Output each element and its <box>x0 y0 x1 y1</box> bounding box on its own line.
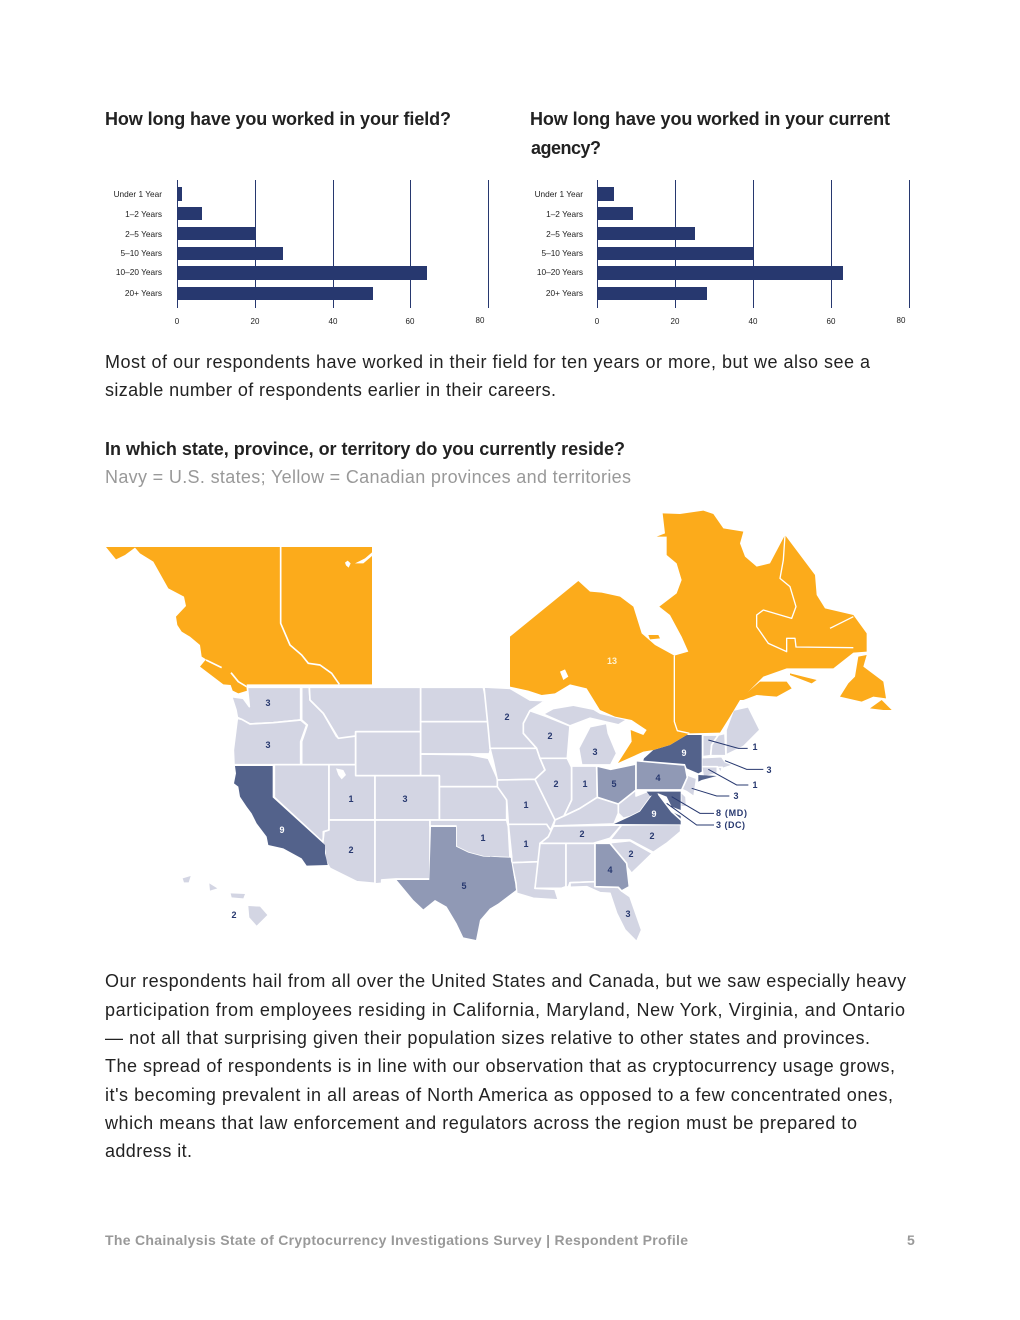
bar chart: years in current agency: 1–2 Years <box>546 209 583 219</box>
heading: residence question: In which state, province, or territory do you currently reside? <box>105 439 625 459</box>
state and province counts: 1 <box>523 800 529 810</box>
heading: years in field: How long have you worked in your field? <box>105 109 451 129</box>
bar chart: years in field: 60 <box>406 317 415 326</box>
text block: tenure summary: sizable number of respondents earlier in their careers. <box>105 380 556 400</box>
state and province counts: 2 <box>348 845 354 855</box>
bar chart: years in field: 40 <box>329 317 338 326</box>
text block: tenure summary: Most of our respondents have worked in their field for ten years or more, but we also see a <box>105 352 871 372</box>
state and province counts: 3 <box>733 791 739 801</box>
state and province counts: 5 <box>611 779 617 789</box>
bar chart: years in current agency: 40 <box>749 317 758 326</box>
bar chart: years in field: 5–10 Years <box>120 248 162 258</box>
heading: years in current agency: How long have you worked in your current <box>530 109 890 129</box>
bar chart: years in field: 1–2 Years <box>125 209 162 219</box>
bar chart: years in field <box>114 180 488 326</box>
state and province counts: 3 <box>265 698 271 708</box>
bar chart: years in current agency: Under 1 Year <box>535 189 583 199</box>
state and province counts: 4 <box>607 865 613 875</box>
bar chart: years in current agency: 10–20 Years <box>537 267 583 277</box>
bar chart: years in current agency: 0 <box>595 317 600 326</box>
state and province counts: 2 <box>547 731 553 741</box>
bar chart: years in current agency: 60 <box>827 317 836 326</box>
footer: page number: 5 <box>907 1232 915 1248</box>
state and province counts: 1 <box>752 780 758 790</box>
state and province counts: 4 <box>655 773 661 783</box>
state and province counts: 3 <box>625 909 631 919</box>
state and province counts: 3 <box>592 747 598 757</box>
state and province counts: 3 <box>766 765 772 775</box>
bar chart: years in current agency: 20 <box>671 317 680 326</box>
bar chart: years in field: 20 <box>251 317 260 326</box>
western United States <box>183 687 516 940</box>
eastern United States <box>484 687 763 942</box>
Canada west: British Columbia and Alberta <box>106 547 372 693</box>
bar chart: years in current agency: 2–5 Years <box>546 229 583 239</box>
text block: geographic summary <box>104 971 906 1161</box>
state and province counts: 2 <box>231 910 237 920</box>
state and province counts <box>231 656 772 920</box>
state and province counts: 9 <box>651 809 657 819</box>
text block: geographic summary: — not all that surprising given their population sizes relative to other states and provinces. <box>105 1028 870 1048</box>
state and province counts: 1 <box>752 742 758 752</box>
state and province counts: 5 <box>461 881 467 891</box>
text block: geographic summary: which means that law enforcement and regulators across the region must be prepared to <box>104 1113 857 1133</box>
state and province counts: 3 <box>265 740 271 750</box>
Canada east: Ontario, Quebec, Labrador, Maritimes <box>510 511 892 763</box>
bar chart: years in field: Under 1 Year <box>114 189 162 199</box>
state and province counts: 2 <box>553 779 559 789</box>
bar chart: years in current agency: 80 <box>897 316 906 325</box>
text block: geographic summary: participation from employees residing in California, Maryland, New York, Virginia, and Ontario <box>105 1000 905 1020</box>
state and province counts: 9 <box>279 825 285 835</box>
bar chart: years in field: 10–20 Years <box>116 267 162 277</box>
state and province counts: 8 (MD) <box>716 808 747 818</box>
state and province counts: 9 <box>681 748 687 758</box>
state and province counts: 1 <box>348 794 354 804</box>
heading: years in current agency <box>530 109 890 158</box>
map: North America respondents <box>106 511 892 942</box>
leader lines <box>667 740 763 825</box>
state and province counts: 1 <box>523 839 529 849</box>
text block: geographic summary: The spread of respondents is in line with our observation that as cryptocurrency usage grows, <box>105 1056 895 1076</box>
text block: geographic summary: address it. <box>105 1141 192 1161</box>
bar chart: years in field: 2–5 Years <box>125 229 162 239</box>
state and province counts: 1 <box>480 833 486 843</box>
bar chart: years in current agency: 5–10 Years <box>541 248 583 258</box>
state and province counts: 13 <box>607 656 617 666</box>
state and province counts: 2 <box>628 849 634 859</box>
state and province counts: 1 <box>582 779 588 789</box>
bar chart: years in field: 80 <box>476 316 485 325</box>
text block: geographic summary: Our respondents hail from all over the United States and Canada, but we saw especially heavy <box>105 971 906 991</box>
bar chart: years in current agency: 20+ Years <box>546 288 583 298</box>
state and province counts: 3 (DC) <box>716 820 745 830</box>
bar chart: years in field: 20+ Years <box>125 288 162 298</box>
state and province counts: 2 <box>579 829 585 839</box>
heading: years in current agency: agency? <box>531 138 601 158</box>
state and province counts: 2 <box>649 831 655 841</box>
bar chart: years in current agency <box>535 180 910 326</box>
state and province counts: 2 <box>504 712 510 722</box>
map legend note: Navy = U.S. states; Yellow = Canadian provinces and territories <box>105 467 631 487</box>
footer: report title: The Chainalysis State of Cryptocurrency Investigations Survey | Respondent Profile <box>105 1232 688 1248</box>
text block: geographic summary: it's becoming prevalent in all areas of North America as opposed to a few concentrated ones, <box>105 1085 893 1105</box>
state and province counts: 3 <box>402 794 408 804</box>
bar chart: years in field: 0 <box>175 317 180 326</box>
text block: tenure summary <box>105 352 871 400</box>
